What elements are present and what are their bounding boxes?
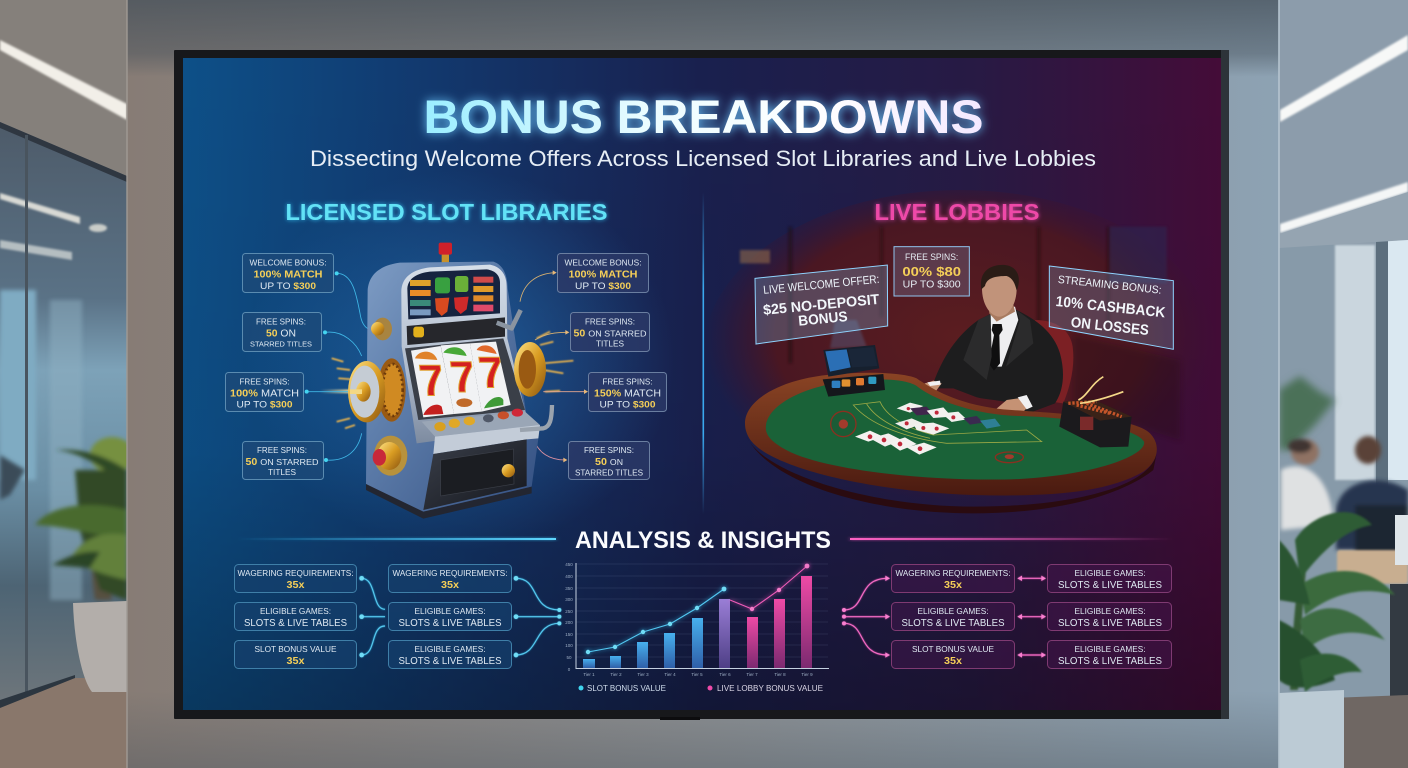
insight box: eligible column 4 bottom: ELIGIBLE GAMES: [1074, 644, 1146, 654]
insight box: slot bonus value column 3: 35x [944, 656, 962, 667]
callout: welcome bonus right: WELCOME BONUS: [564, 258, 642, 268]
insight box: eligible column 2: ELIGIBLE GAMES: [414, 606, 486, 616]
lower knob with red cap [373, 436, 407, 476]
slot bonus line [586, 587, 726, 654]
y axis labels: 200 [565, 620, 573, 625]
connector lines [305, 270, 588, 462]
y axis labels: 250 [565, 609, 573, 614]
insight box: slot bonus value column 1: SLOT BONUS VALUE [254, 644, 337, 654]
callout: free spins match left: FREE SPINS: [240, 376, 290, 386]
insight box: eligible column 2 lower [388, 640, 512, 668]
x axis labels: Tier 7 [746, 672, 758, 677]
reels with 777: 7 [447, 353, 479, 402]
legend: slot bonus value: SLOT BONUS VALUE [587, 684, 666, 693]
cyan rule [237, 538, 556, 540]
x axis labels: Tier 8 [774, 672, 786, 677]
insight box: slot bonus value column 1 [234, 640, 356, 668]
callout: free spins right: FREE SPINS: [585, 316, 635, 326]
callout: free spins left: FREE SPINS: [256, 316, 306, 326]
heading: live lobbies: LIVE LOBBIES [874, 199, 1040, 225]
insight box: wagering column 3: 35x [944, 580, 962, 591]
dealer [917, 265, 1063, 419]
holographic callout: live welcome offer: BONUS [798, 309, 848, 330]
holographic callout: live welcome offer: $25 NO-DEPOSIT [762, 292, 880, 319]
insight box: slot bonus value column 3 [892, 640, 1014, 668]
holographic callout: free spins: 00% $80 [902, 264, 961, 279]
callout: free spins match right: UP TO $300 [600, 400, 656, 410]
section heading: analysis and insights: ANALYSIS & INSIGHTS [575, 527, 831, 554]
callout: free spins match left [226, 372, 304, 412]
callout: welcome bonus right: 100% MATCH [568, 268, 638, 280]
callout: free spins bottom left: TITLES [268, 468, 296, 477]
top red button [439, 243, 452, 263]
callout: welcome bonus right: UP TO $300 [575, 281, 631, 292]
playing cards [855, 403, 1001, 455]
legend: live lobby bonus value: LIVE LOBBY BONUS VALUE [717, 684, 823, 693]
upper lever [497, 310, 521, 328]
insight box: eligible column 3: SLOTS & LIVE TABLES [902, 618, 1005, 629]
insight box: wagering column 1 [234, 564, 356, 592]
front frame [401, 265, 540, 443]
background plant [1279, 376, 1335, 450]
insight box: eligible column 4 bottom: SLOTS & LIVE TABLES [1058, 656, 1162, 667]
lower cabinet and drawer [366, 439, 532, 519]
lower lever [520, 405, 552, 430]
insight box: wagering column 2 [388, 564, 512, 592]
callout: free spins bottom left [242, 442, 324, 480]
holographic callout: free spins: UP TO $300 [903, 280, 961, 291]
left office view [0, 0, 134, 768]
callout: free spins match right [588, 372, 666, 412]
y axis labels: 350 [565, 586, 573, 591]
holographic callout: live welcome offer: LIVE WELCOME OFFER: [763, 273, 880, 297]
insight box: wagering column 1: 35x [286, 580, 305, 591]
cabinet side [366, 262, 540, 517]
illustration: live dealer table [720, 190, 1184, 514]
upper knob [371, 318, 392, 340]
dealer chair [1035, 320, 1073, 403]
callout: welcome bonus left: WELCOME BONUS: [250, 258, 326, 268]
bars [583, 576, 812, 668]
insight box: wagering column 2: 35x [441, 580, 459, 591]
holographic callout: free spins: FREE SPINS: [905, 252, 958, 262]
holographic callout: streaming bonus: 10% CASHBACK [1055, 294, 1166, 321]
button shelf [422, 409, 540, 454]
callout: free spins bottom right [568, 442, 650, 480]
callout: free spins bottom left: FREE SPINS: [257, 445, 307, 455]
x axis labels [583, 672, 813, 677]
holographic callout: live welcome offer [755, 265, 888, 344]
callout: welcome bonus left: UP TO $300 [260, 281, 316, 292]
callout: free spins bottom left: 50 ON STARRED [246, 457, 318, 468]
insight box: eligible column 4 top: SLOTS & LIVE TABLES [1058, 580, 1162, 591]
holographic callout: streaming bonus: ON LOSSES [1070, 315, 1150, 339]
connectors: right insight columns [842, 576, 1046, 658]
screen [183, 58, 1221, 710]
insight box: eligible column 2: SLOTS & LIVE TABLES [398, 618, 502, 629]
plant pot [73, 601, 127, 692]
reels with 777: 7 [416, 357, 448, 406]
callout: free spins bottom right: 50 ON [595, 456, 623, 468]
callout: welcome bonus left: 100% MATCH [254, 268, 322, 280]
holographic callout: free spins [894, 247, 969, 296]
callout: welcome bonus right [558, 254, 648, 292]
callout: welcome bonus left [242, 254, 334, 292]
holographic callout: streaming bonus: STREAMING BONUS: [1057, 274, 1162, 297]
insight box: slot bonus value column 1: 35x [286, 656, 305, 667]
energy streaks [320, 332, 573, 428]
insight box: eligible column 4 bottom [1048, 640, 1172, 668]
insight box: eligible column 4 top [1048, 564, 1172, 592]
x axis labels: Tier 1 [583, 672, 595, 677]
pink rule [850, 538, 1173, 540]
table [745, 373, 1157, 513]
x axis labels: Tier 6 [719, 672, 731, 677]
plant [35, 437, 134, 600]
insight box: eligible column 2 [388, 602, 512, 630]
y axis labels [565, 562, 573, 672]
right office view [1279, 0, 1408, 768]
insight box: eligible column 4 middle: ELIGIBLE GAMES: [1074, 606, 1146, 616]
callout: free spins right: TITLES [596, 340, 624, 348]
insight box: eligible column 2 lower: ELIGIBLE GAMES: [414, 644, 486, 654]
insight box: eligible column 3 [892, 602, 1014, 630]
insight box: wagering column 3: WAGERING REQUIREMENTS: [896, 568, 1010, 578]
x axis labels: Tier 2 [610, 672, 622, 677]
x axis labels: Tier 5 [691, 672, 703, 677]
top display [407, 269, 500, 319]
y axis labels: 450 [565, 562, 573, 567]
y axis labels: 0 [568, 667, 571, 672]
callout: free spins match left: 100% MATCH [230, 388, 299, 400]
callout: free spins match left: UP TO $300 [236, 400, 292, 410]
callout: free spins bottom right: STARRED TITLES [575, 468, 643, 478]
insight box: eligible column 4 middle [1048, 602, 1172, 630]
bonus value chart [565, 562, 829, 693]
blurred people at table [1281, 436, 1408, 555]
insight box: eligible column 1 [234, 602, 356, 630]
y axis labels: 300 [565, 597, 573, 602]
callout: free spins right: 50 ON STARRED [574, 328, 646, 340]
insight box: eligible column 4 top: ELIGIBLE GAMES: [1074, 568, 1146, 578]
insight box: wagering column 3 [892, 564, 1014, 592]
x axis labels: Tier 3 [637, 672, 649, 677]
connectors: left insight columns [359, 576, 561, 657]
reels with 777 [405, 338, 525, 420]
illustration: slot machine [305, 243, 588, 519]
callout: free spins match right: FREE SPINS: [602, 376, 652, 386]
x axis labels: Tier 4 [664, 672, 676, 677]
insight box: eligible column 3: ELIGIBLE GAMES: [918, 606, 988, 616]
big left gold wheel [348, 358, 406, 422]
insight box: eligible column 4 middle: SLOTS & LIVE TABLES [1058, 618, 1162, 629]
chip tray with sparkle [1059, 377, 1132, 447]
callout: free spins left [242, 312, 322, 352]
live lobby line [730, 564, 809, 611]
y axis labels: 400 [565, 574, 573, 579]
heading: licensed slot libraries: LICENSED SLOT LIBRARIES [286, 199, 608, 225]
chips [831, 411, 1023, 463]
mid black panel [407, 317, 505, 345]
table-top tablet [823, 320, 885, 397]
insight box: wagering column 1: WAGERING REQUIREMENTS: [238, 568, 354, 578]
centre divider [702, 192, 704, 514]
foreground plant [1279, 512, 1395, 692]
y axis labels: 100 [565, 643, 573, 648]
monitor frame [174, 50, 1229, 720]
callout: free spins left: 50 ON [266, 328, 296, 340]
callout: free spins left: STARRED TITLES [250, 340, 312, 348]
callout: free spins right [570, 312, 650, 352]
x axis labels: Tier 9 [801, 672, 813, 677]
insight box: eligible column 2 lower: SLOTS & LIVE TABLES [398, 656, 502, 667]
title: BONUS BREAKDOWNS [424, 90, 984, 143]
casino room backdrop [720, 190, 1184, 438]
callout: free spins match right: 150% MATCH [594, 388, 661, 400]
callout: free spins bottom right: FREE SPINS: [584, 445, 634, 455]
betting lines [853, 402, 1042, 443]
chart axes [576, 563, 829, 668]
plant pot right [1279, 690, 1344, 768]
holographic callout: streaming bonus [1049, 266, 1173, 349]
insight box: eligible column 1: SLOTS & LIVE TABLES [244, 618, 347, 629]
insight box: slot bonus value column 3: SLOT BONUS VALUE [912, 644, 994, 654]
y axis labels: 50 [566, 655, 572, 660]
insight box: wagering column 2: WAGERING REQUIREMENTS: [392, 568, 508, 578]
insight box: eligible column 1: ELIGIBLE GAMES: [260, 606, 331, 616]
y axis labels: 150 [565, 632, 573, 637]
felt [766, 379, 1144, 480]
right gold wheel [514, 342, 546, 397]
reels with 777: 7 [476, 349, 507, 397]
subtitle: Dissecting Welcome Offers Across Licensed Slot Libraries and Live Lobbies [310, 146, 1096, 171]
